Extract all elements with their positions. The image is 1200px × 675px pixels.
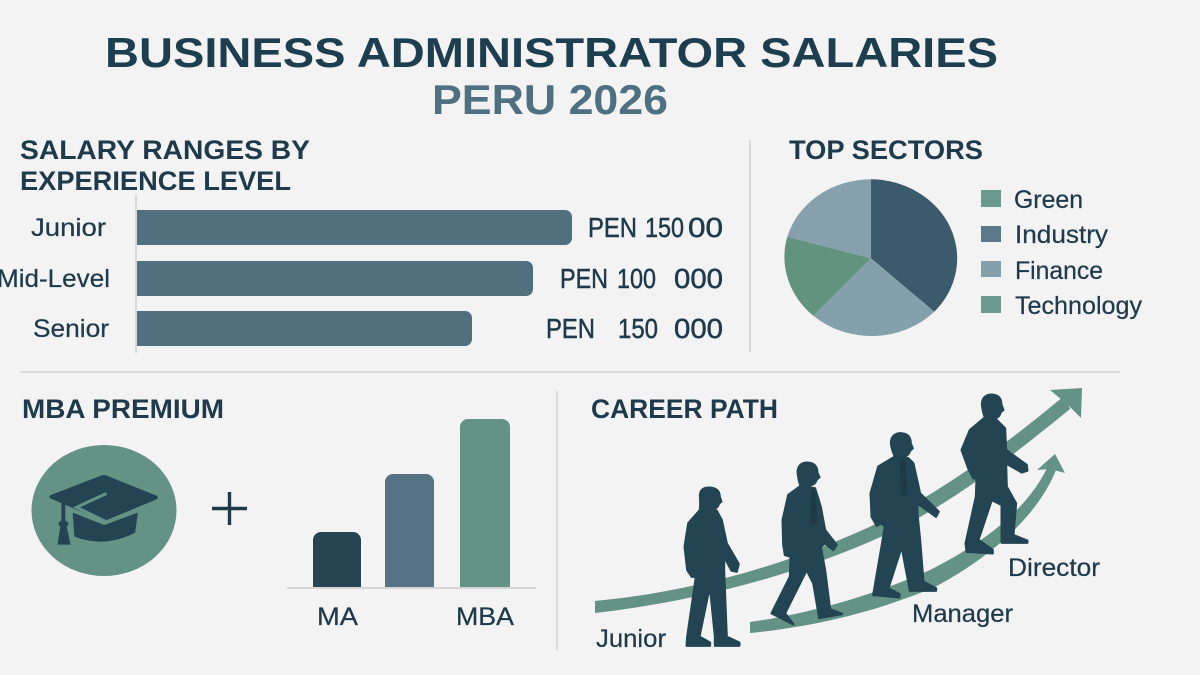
stage labels: Director <box>1008 554 1100 582</box>
legend: Green <box>1014 186 1083 214</box>
legend: Finance <box>1015 257 1103 285</box>
figure: director <box>962 395 1027 553</box>
bar chart: salary by level: PEN <box>546 313 595 344</box>
bar chart: salary by level: 100 <box>617 263 656 294</box>
bar chart: MA vs MBA: MBA <box>456 603 514 631</box>
title: BUSINESS ADMINISTRATOR SALARIES <box>105 29 998 76</box>
stage labels <box>596 554 1100 653</box>
icon: graduation cap <box>32 445 176 576</box>
stage labels: Manager <box>912 600 1013 628</box>
bar chart: MA vs MBA: MA <box>317 603 358 631</box>
heading: career path: CAREER PATH <box>591 394 778 424</box>
panel: salary ranges by experience level <box>0 135 723 353</box>
heading: salary ranges: EXPERIENCE LEVEL <box>20 166 291 196</box>
bar chart: salary by level: 000 <box>674 313 723 344</box>
bar chart: salary by level: 000 <box>674 263 723 294</box>
pie chart <box>784 179 957 336</box>
panel: top sectors <box>784 135 1142 336</box>
figures: four people climbing <box>685 395 1027 646</box>
panel: career path <box>591 388 1100 653</box>
arrow: lower growth arrow <box>750 454 1065 633</box>
bar chart: salary by level: 150 <box>618 313 658 344</box>
heading: salary ranges <box>20 135 310 196</box>
heading: top sectors: TOP SECTORS <box>789 135 983 165</box>
icon: plus sign <box>212 492 247 525</box>
bar chart: salary by level: 150 <box>645 212 684 243</box>
legend <box>981 186 1142 320</box>
figure: professional <box>772 463 842 624</box>
bar chart: salary by level: 00 <box>688 212 723 243</box>
title <box>105 29 998 123</box>
title: PERU 2026 <box>432 76 668 123</box>
stage labels: Junior <box>596 625 666 653</box>
figure: manager <box>871 433 939 597</box>
legend: Industry <box>1015 221 1109 249</box>
figure: junior <box>685 488 739 646</box>
heading: salary ranges: SALARY RANGES BY <box>20 135 310 165</box>
arrow: upper growth arrow <box>595 388 1082 613</box>
legend: Technology <box>1015 292 1142 320</box>
panel: MBA premium <box>22 394 536 631</box>
bar chart: MA vs MBA <box>287 419 536 631</box>
bar chart: salary by level: PEN <box>560 263 608 294</box>
bar chart: salary by level: Junior <box>31 214 106 242</box>
bar chart: salary by level <box>0 195 723 353</box>
bar chart: salary by level: Senior <box>33 315 109 343</box>
bar chart: salary by level: PEN <box>588 212 637 243</box>
heading: MBA premium: MBA PREMIUM <box>22 394 224 424</box>
bar chart: salary by level: Mid-Level <box>0 265 110 293</box>
